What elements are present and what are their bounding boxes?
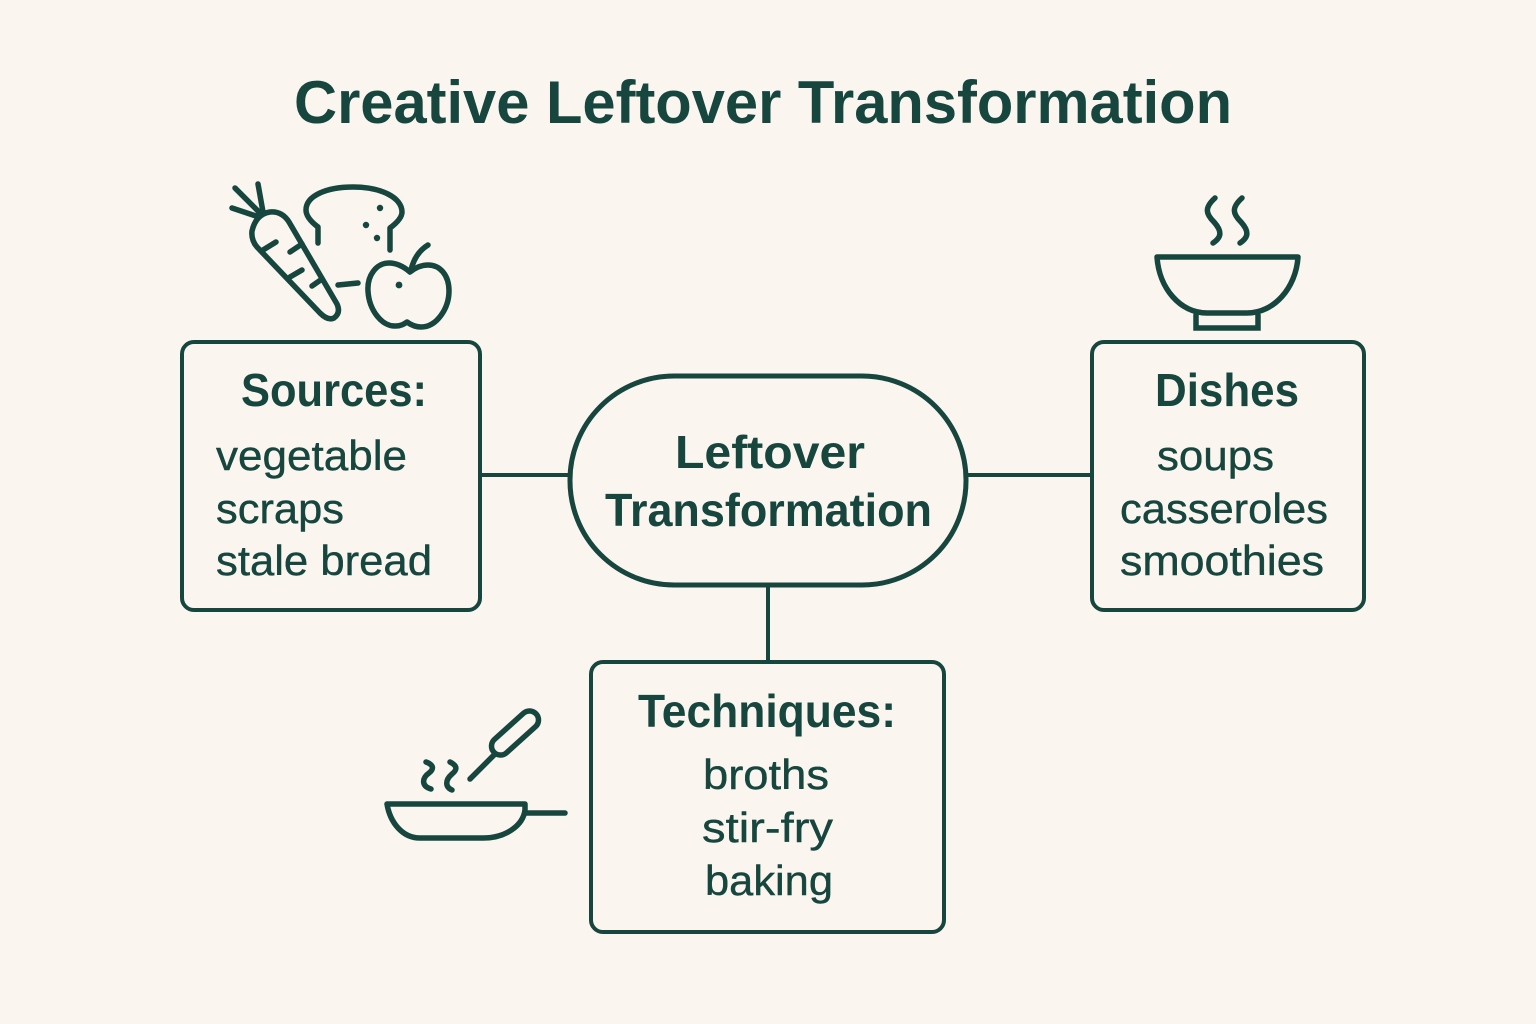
center node: leftover transformation: Leftover: [675, 426, 865, 478]
connector: center to dishes: [966, 473, 1092, 477]
heading: techniques: Techniques:: [638, 685, 896, 737]
text: broths, stir-fry, baking: broths: [703, 751, 829, 798]
heading: dishes: Dishes: [1155, 364, 1299, 416]
text: soups, casseroles, smoothies: soups: [1157, 432, 1274, 479]
center node: leftover transformation: [570, 376, 966, 585]
text: vegetable scraps, stale bread: [216, 432, 432, 584]
text: broths, stir-fry, baking: [702, 751, 833, 904]
text: vegetable scraps, stale bread: vegetable: [216, 432, 407, 479]
title: Creative Leftover Transformation: [294, 69, 1232, 136]
heading: sources: Sources:: [241, 364, 427, 416]
text: vegetable scraps, stale bread: stale bread: [216, 537, 432, 584]
text: broths, stir-fry, baking: stir-fry: [702, 804, 833, 851]
icon: steaming bowl: [1157, 198, 1298, 328]
text: soups, casseroles, smoothies: casseroles: [1120, 485, 1328, 532]
connector: sources to center: [480, 473, 570, 477]
icon: carrot, bread and apple: [232, 184, 449, 327]
center node: leftover transformation: Transformation: [605, 484, 932, 536]
panel: dishes: [1092, 342, 1364, 610]
panel: sources: [182, 342, 480, 610]
connector: center to techniques: [766, 585, 770, 662]
icon: frying pan and spatula: [387, 707, 565, 838]
text: soups, casseroles, smoothies: smoothies: [1120, 537, 1324, 584]
text: broths, stir-fry, baking: baking: [705, 857, 833, 904]
text: soups, casseroles, smoothies: [1120, 432, 1328, 584]
panel: techniques: [591, 662, 944, 932]
text: vegetable scraps, stale bread: scraps: [216, 485, 344, 532]
